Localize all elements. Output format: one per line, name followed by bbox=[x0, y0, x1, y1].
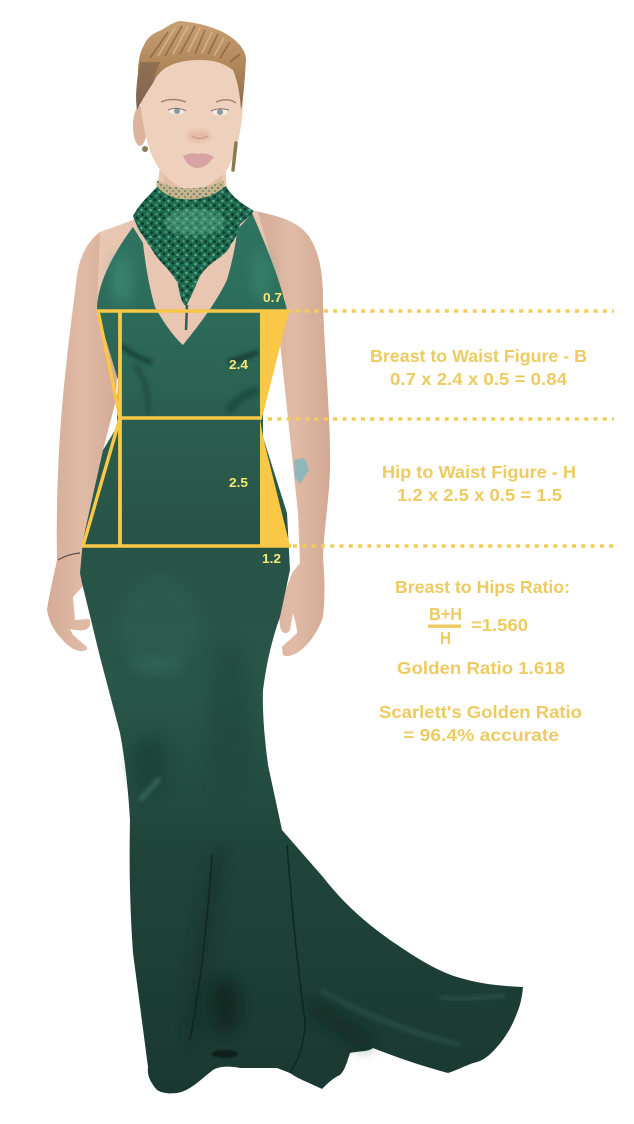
golden ratio measurement overlay bbox=[81, 311, 291, 546]
text block: breast to hips ratio: H bbox=[440, 628, 451, 648]
earrings bbox=[142, 143, 236, 170]
eyebrows bbox=[161, 100, 236, 103]
hair bbox=[136, 21, 246, 110]
text block: hip to waist: Hip to Waist Figure - H bbox=[382, 462, 576, 482]
waist line bbox=[120, 416, 262, 420]
necklace bbox=[133, 180, 254, 330]
left trapezoid lines bbox=[83, 311, 120, 546]
breast line bbox=[97, 309, 291, 313]
measurement label: 0.7: 0.7 bbox=[263, 290, 282, 305]
nose bbox=[192, 136, 208, 138]
neck and chest bbox=[97, 165, 285, 350]
text block: breast to waist bbox=[370, 346, 587, 389]
right shaded wedge: lower bbox=[260, 419, 290, 546]
text block: breast to waist: 0.7 x 2.4 x 0.5 = 0.84 bbox=[390, 369, 567, 389]
dotted guide: breast bbox=[296, 309, 614, 313]
right arm and hand bbox=[255, 211, 330, 656]
text: golden ratio value: Golden Ratio 1.618 bbox=[397, 658, 565, 678]
eyes bbox=[168, 108, 229, 115]
hip line bbox=[81, 544, 291, 548]
text block: breast to hips ratio bbox=[395, 577, 570, 648]
text block: accuracy conclusion bbox=[379, 702, 582, 745]
text block: breast to hips ratio: Breast to Hips Ratio: bbox=[395, 577, 570, 597]
dotted guide: waist bbox=[268, 417, 614, 421]
measurement label: 1.2: 1.2 bbox=[262, 551, 281, 566]
figure: woman in green gown bbox=[47, 21, 523, 1093]
gown bbox=[80, 213, 523, 1093]
text block: hip to waist bbox=[382, 462, 576, 505]
dotted guide: hip bbox=[293, 544, 614, 548]
text block: breast to hips ratio: =1.560 bbox=[471, 615, 528, 635]
text block: accuracy conclusion: = 96.4% accurate bbox=[403, 725, 559, 745]
lips bbox=[183, 153, 214, 168]
tattoo bbox=[294, 458, 309, 484]
text block: breast to hips ratio: B+H bbox=[429, 604, 462, 624]
text block: breast to waist: Breast to Waist Figure - B bbox=[370, 346, 587, 366]
head bbox=[133, 21, 246, 200]
text block: accuracy conclusion: Scarlett's Golden Ratio bbox=[379, 702, 582, 722]
gown folds and highlights bbox=[112, 249, 505, 1073]
right shaded wedge: upper bbox=[260, 311, 289, 418]
bracelet bbox=[58, 553, 80, 560]
necklace sheen bbox=[165, 208, 225, 236]
text block: hip to waist: 1.2 x 2.5 x 0.5 = 1.5 bbox=[397, 485, 562, 505]
measurement label: 2.5: 2.5 bbox=[229, 475, 248, 490]
measurement label: 2.4: 2.4 bbox=[229, 357, 249, 372]
left arm and hand bbox=[47, 232, 120, 651]
vertical measure line bbox=[118, 311, 122, 546]
